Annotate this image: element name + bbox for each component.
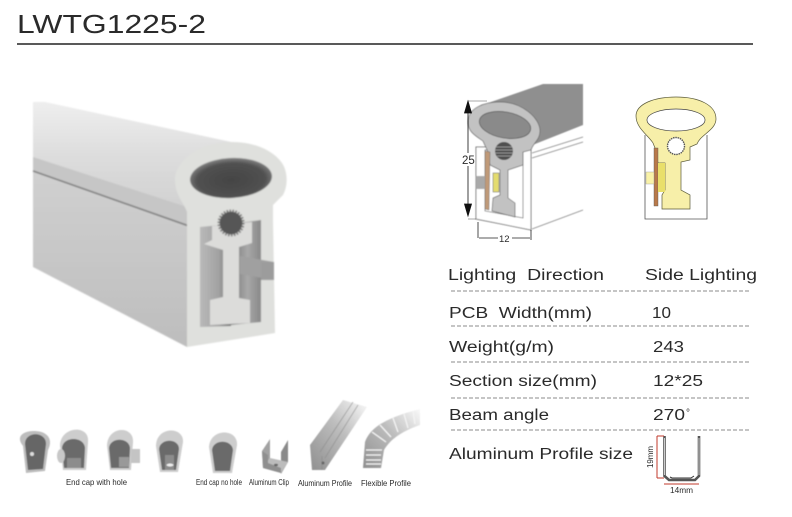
icon: end cap 1 <box>20 431 50 473</box>
cross-section diagram lit in yellow <box>636 97 716 219</box>
row: beam angle <box>449 407 690 424</box>
row: beam angle: Beam angle <box>449 407 549 424</box>
sectional diagram with dimensions: 12 <box>499 234 510 245</box>
row: lighting direction: Side Lighting <box>645 267 757 284</box>
icon: aluminum profile <box>310 400 367 470</box>
accessory captions: Flexible Profile <box>361 478 411 488</box>
title: LWTG1225-2 <box>17 9 206 39</box>
accessory thumbnails <box>20 400 420 474</box>
row: pcb width: PCB Width(mm) <box>449 305 592 322</box>
specification table <box>448 267 757 463</box>
accessory captions: End cap no hole <box>196 477 242 487</box>
icon: flexible profile <box>363 409 420 468</box>
row: section size <box>449 373 703 390</box>
icon: end cap 3 <box>107 430 140 470</box>
icon: aluminum profile dimensions: 19mm <box>646 446 655 468</box>
row: weight: 243 <box>653 339 684 356</box>
row: pcb width <box>449 305 671 322</box>
icon: aluminum profile dimensions <box>646 436 699 495</box>
accessory captions: End cap with hole <box>66 477 127 487</box>
row: aluminum profile size: Aluminum Profile size <box>449 446 633 463</box>
row: pcb width: 10 <box>652 305 671 322</box>
row: beam angle: 270 <box>653 407 685 424</box>
row: weight: Weight(g/m) <box>449 339 554 356</box>
accessory captions: Aluminum Clip <box>249 477 289 487</box>
row: lighting direction: Lighting Direction <box>448 267 604 284</box>
icon: end cap 4 <box>156 430 183 472</box>
icon: end cap 2 <box>57 430 88 470</box>
row: beam angle: ° <box>686 408 690 419</box>
sectional diagram with dimensions: 25 <box>462 155 475 167</box>
dimension labels <box>464 101 472 216</box>
accessory captions: Aluminum Profile <box>298 478 352 488</box>
row: section size: 12*25 <box>653 373 703 390</box>
row: lighting direction <box>448 267 757 284</box>
icon: aluminum clip <box>262 439 288 474</box>
row: section size: Section size(mm) <box>449 373 597 390</box>
main product image: neon profile <box>33 102 287 347</box>
top surface of the sectional diagram <box>488 84 583 146</box>
accessory captions <box>66 477 411 488</box>
icon: aluminum profile dimensions: 14mm <box>670 486 693 495</box>
icon: end cap no hole <box>209 432 237 473</box>
sectional diagram with dimensions <box>461 84 583 245</box>
row: weight <box>449 339 684 356</box>
